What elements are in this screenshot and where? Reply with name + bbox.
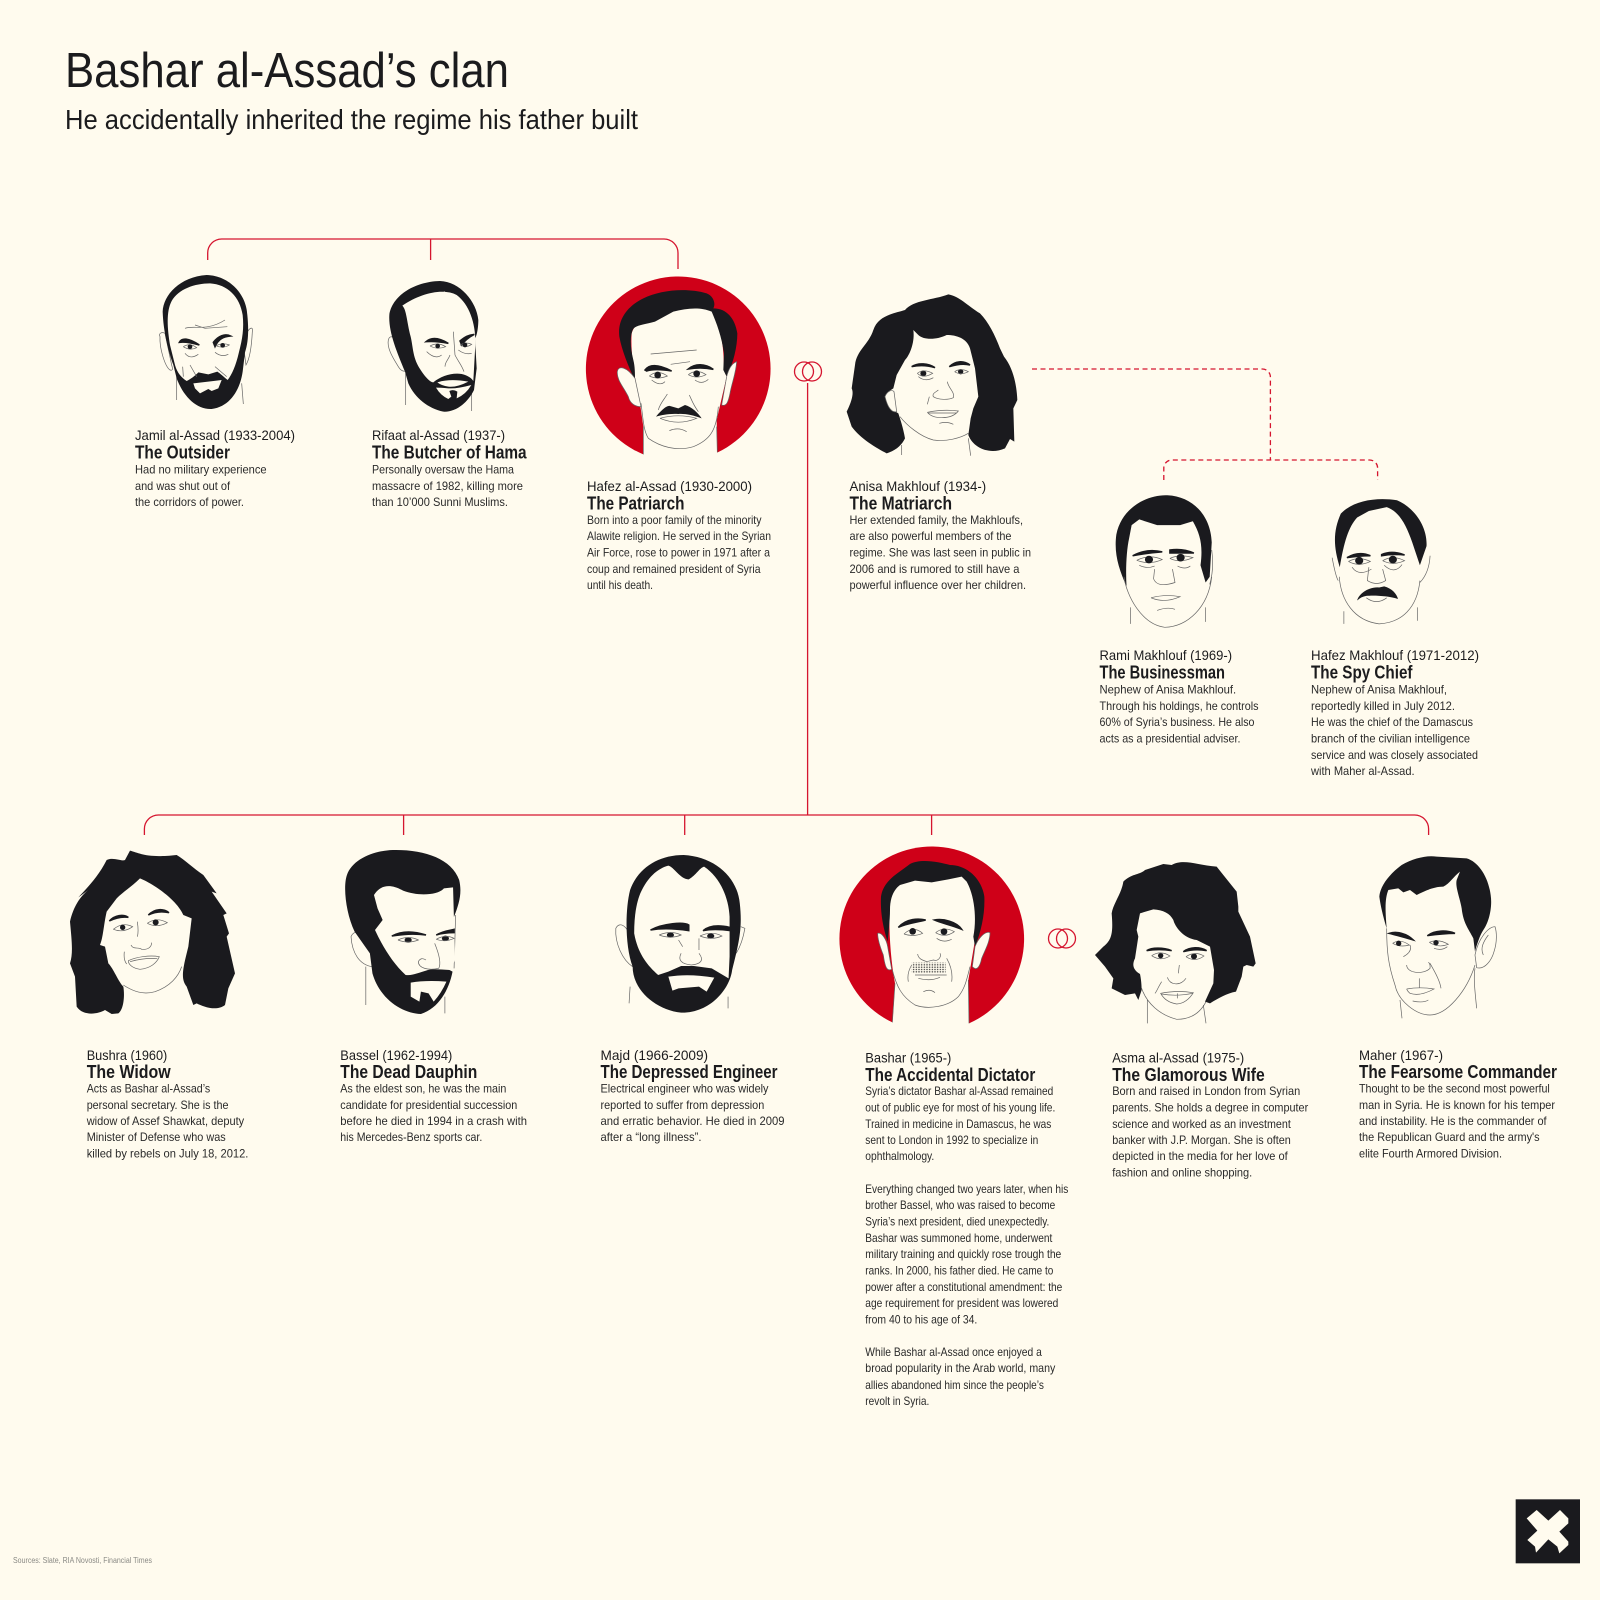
text: Majd: Majd (1966-2009)	[600, 1047, 708, 1063]
title: Bashar al-Assad’s clan	[65, 44, 509, 98]
panel: Anisa Makhlouf	[847, 294, 1031, 592]
text: Bassel: Bassel (1962-1994)	[340, 1047, 452, 1063]
text: Hafez: coup and remained president of Syria	[587, 562, 761, 576]
panel: Bassel	[340, 850, 527, 1144]
text: Rifaat	[372, 427, 527, 509]
text: Bashar	[865, 1050, 1068, 1408]
text: Jamil: the corridors of power.	[135, 495, 244, 509]
portrait: Hafez Makhlouf	[1332, 499, 1430, 624]
panel: Hafez Makhlouf	[1310, 499, 1479, 778]
marriage rings: Bashar and Asma	[1048, 929, 1076, 948]
text: Bashar: Trained in medicine in Damascus, he was	[865, 1117, 1051, 1131]
text: Bashar: allies abandoned him since the people’s	[865, 1378, 1044, 1392]
text: Hafez Makhlouf: service and was closely associated	[1311, 748, 1478, 762]
text: Anisa: Anisa Makhlouf (1934-)	[850, 478, 986, 494]
text: Asma: parents. She holds a degree in computer	[1112, 1100, 1308, 1114]
text: Hafez: Air Force, rose to power in 1971 after a	[587, 546, 770, 560]
text: Asma	[1112, 1050, 1308, 1180]
text: Bushra: widow of Assef Shawkat, deputy	[86, 1114, 244, 1128]
text: Jamil: Had no military experience	[135, 462, 267, 476]
panel: Bashar	[839, 847, 1068, 1408]
text: Bashar: from 40 to his age of 34.	[865, 1312, 977, 1326]
text: Bushra: Acts as Bashar al-Assad’s	[87, 1082, 210, 1096]
text: Bushra: killed by rebels on July 18, 2012.	[87, 1146, 248, 1160]
text: Rifaat: than 10’000 Sunni Muslims.	[372, 495, 508, 509]
connector: Makhlouf nephews (dashed)	[1032, 369, 1378, 480]
text: Bashar: military training and quickly rose trough the	[865, 1247, 1062, 1261]
marriage rings: Hafez and Anisa	[794, 362, 822, 381]
text: Bashar: sent to London in 1992 to specialize in	[865, 1133, 1038, 1147]
text: Rifaat: Personally oversaw the Hama	[372, 462, 514, 476]
text: Bashar: Everything changed two years later, when his	[865, 1182, 1068, 1196]
panel: Jamil al-Assad	[135, 275, 295, 509]
text: Asma: depicted in the media for her love of	[1112, 1149, 1288, 1163]
text: Maher: The Fearsome Commander	[1359, 1061, 1557, 1082]
text: Bassel: his Mercedes-Benz sports car.	[340, 1130, 482, 1144]
text: Hafez	[587, 478, 771, 592]
text: Hafez Makhlouf: branch of the civilian intelligence	[1311, 732, 1470, 746]
text: Majd	[600, 1047, 785, 1144]
text: Hafez: until his death.	[587, 578, 653, 592]
text: Bassel: The Dead Dauphin	[340, 1061, 477, 1082]
text: Anisa: Her extended family, the Makhloufs,	[850, 513, 1023, 527]
text: Maher: man in Syria. He is known for his temper	[1359, 1098, 1555, 1112]
text: Hafez Makhlouf: with Maher al-Assad.	[1310, 764, 1415, 778]
portrait: Bashar	[839, 847, 1024, 1026]
text: Hafez Makhlouf: reportedly killed in July 2012.	[1311, 699, 1455, 713]
text: Rifaat: The Butcher of Hama	[372, 442, 527, 462]
text: Bashar: out of public eye for most of his young life.	[865, 1100, 1055, 1114]
text: Hafez Makhlouf: Nephew of Anisa Makhlouf,	[1311, 682, 1447, 696]
text: Hafez: Hafez al-Assad (1930-2000)	[587, 478, 752, 494]
text: Rifaat: Rifaat al-Assad (1937-)	[372, 427, 505, 443]
text: Jamil	[135, 427, 295, 509]
text: Maher	[1359, 1047, 1557, 1160]
text: Rifaat: massacre of 1982, killing more	[372, 479, 523, 493]
text: Majd: Electrical engineer who was widely	[600, 1082, 768, 1096]
text: Bashar: broad popularity in the Arab world, many	[865, 1361, 1055, 1375]
portrait: Rifaat	[388, 281, 478, 412]
text: Hafez Makhlouf: The Spy Chief	[1311, 662, 1413, 682]
portrait: Bushra	[70, 851, 235, 1014]
text: Bassel: before he died in 1994 in a crash with	[340, 1114, 527, 1128]
text: Hafez: Born into a poor family of the minority	[587, 513, 762, 527]
portrait: Asma	[1095, 862, 1256, 1023]
portrait: Jamil	[160, 275, 253, 409]
text: Asma: fashion and online shopping.	[1112, 1166, 1252, 1180]
text: Bashar: power after a constitutional amendment: the	[865, 1280, 1063, 1294]
text: Rami	[1100, 647, 1258, 746]
text: Bashar: The Accidental Dictator	[865, 1064, 1035, 1085]
text: Bushra: Bushra (1960)	[87, 1047, 167, 1063]
text: Rami: 60% of Syria’s business. He also	[1100, 715, 1255, 729]
text: Rami: Rami Makhlouf (1969-)	[1100, 647, 1232, 663]
text: Asma: science and worked as an investment	[1112, 1117, 1291, 1131]
text: Hafez: Alawite religion. He served in the Syrian	[587, 529, 771, 543]
text: Bashar: Syria’s dictator Bashar al-Assad remained	[865, 1084, 1053, 1098]
text: Bushra: The Widow	[87, 1061, 171, 1082]
text: Rami: The Businessman	[1100, 662, 1225, 682]
text: Bassel: As the eldest son, he was the main	[340, 1082, 506, 1096]
panel: Majd	[600, 855, 785, 1144]
text: Rami: acts as a presidential adviser.	[1100, 732, 1240, 746]
text: Maher: the Republican Guard and the army's	[1359, 1130, 1540, 1144]
text: Jamil: The Outsider	[135, 442, 230, 462]
text: Bashar: Bashar (1965-)	[865, 1050, 951, 1066]
portrait: Bassel	[345, 850, 460, 1014]
text: Anisa: regime. She was last seen in public in	[850, 546, 1031, 560]
text: Jamil: and was shut out of	[135, 479, 231, 493]
text: Rami: Nephew of Anisa Makhlouf.	[1100, 682, 1236, 696]
text: Maher: and instability. He is the commander of	[1359, 1114, 1547, 1128]
portrait: Hafez	[586, 277, 771, 457]
text: Bushra: personal secretary. She is the	[87, 1098, 229, 1112]
text: Majd: The Depressed Engineer	[600, 1061, 778, 1082]
sources: Sources: Slate, RIA Novosti, Financial Times	[13, 1556, 152, 1565]
text: Anisa: The Matriarch	[850, 492, 952, 514]
panel: Rifaat al-Assad	[372, 281, 527, 509]
connector: Hafez and Anisa's children	[144, 383, 1429, 835]
text: Maher: Maher (1967-)	[1359, 1047, 1443, 1063]
text: Bashar: ophthalmology.	[865, 1149, 934, 1163]
text: Bashar: While Bashar al-Assad once enjoyed a	[865, 1345, 1042, 1359]
text: Rami: Through his holdings, he controls	[1100, 699, 1258, 713]
text: Hafez Makhlouf: Hafez Makhlouf (1971-2012)	[1311, 647, 1479, 663]
text: Bassel: candidate for presidential succession	[340, 1098, 517, 1112]
portrait: Anisa	[847, 294, 1017, 456]
text: Bashar: brother Bassel, who was raised to become	[865, 1198, 1056, 1212]
text: Majd: after a “long illness”.	[600, 1130, 702, 1144]
text: Majd: and erratic behavior. He died in 2009	[600, 1114, 785, 1128]
text: Bassel	[340, 1047, 527, 1144]
text: Maher: elite Fourth Armored Division.	[1359, 1146, 1502, 1160]
panel: Maher	[1359, 856, 1557, 1160]
panel: Hafez al-Assad	[586, 277, 771, 592]
text: Asma: Born and raised in London from Syrian	[1112, 1084, 1300, 1098]
text: Bashar: age requirement for president was lowered	[865, 1296, 1058, 1310]
connector: Hafez's siblings	[208, 239, 678, 269]
portrait: Majd	[616, 855, 745, 1013]
text: Hafez Makhlouf: He was the chief of the Damascus	[1311, 715, 1473, 729]
subtitle: He accidentally inherited the regime his father built	[65, 104, 638, 135]
text: Asma: banker with J.P. Morgan. She is often	[1112, 1133, 1291, 1147]
text: Jamil: Jamil al-Assad (1933-2004)	[135, 427, 295, 443]
panel: Asma	[1095, 862, 1308, 1180]
text: Anisa: are also powerful members of the	[850, 529, 1012, 543]
text: Anisa	[850, 478, 1031, 592]
text: Anisa: 2006 and is rumored to still have a	[850, 562, 1020, 576]
logo	[1516, 1499, 1580, 1563]
portrait: Maher	[1379, 856, 1496, 1018]
text: Majd: reported to suffer from depression	[600, 1098, 764, 1112]
text: Asma: The Glamorous Wife	[1112, 1064, 1265, 1085]
text: Bashar: Bashar was summoned home, underwent	[865, 1231, 1053, 1245]
text: Bushra	[86, 1047, 248, 1160]
panel: Bushra	[70, 851, 248, 1160]
panel: Rami Makhlouf	[1100, 495, 1258, 746]
text: Bashar: Syria’s next president, died unexpectedly.	[865, 1214, 1049, 1228]
text: Bushra: Minister of Defense who was	[87, 1130, 226, 1144]
text: Maher: Thought to be the second most powerful	[1359, 1082, 1550, 1096]
text: Anisa: powerful influence over her children.	[850, 578, 1026, 592]
text: Bashar: revolt in Syria.	[865, 1394, 929, 1408]
text: Hafez Makhlouf	[1310, 647, 1479, 778]
text: Bashar: ranks. In 2000, his father died. He came to	[865, 1264, 1054, 1278]
text: Hafez: The Patriarch	[587, 492, 684, 514]
portrait: Rami	[1116, 495, 1213, 627]
text: Asma: Asma al-Assad (1975-)	[1112, 1050, 1244, 1066]
